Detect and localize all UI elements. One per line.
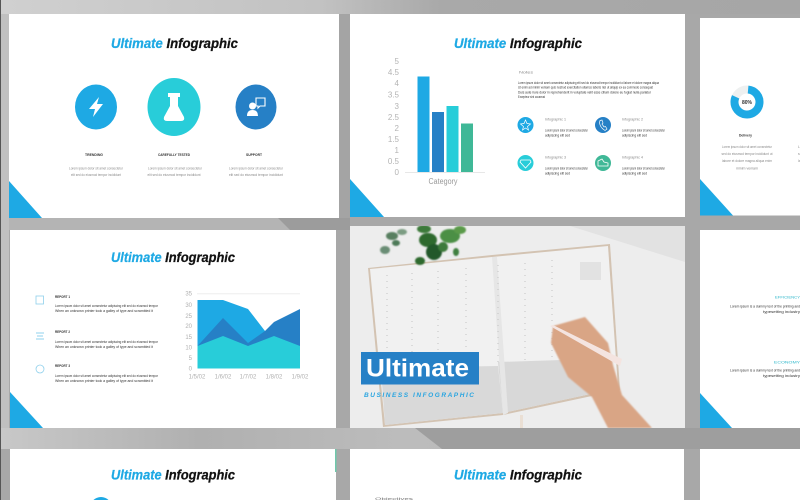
- column: trending: Lorem ipsum dolor sit amet consectetur: [69, 166, 124, 170]
- bar chart: 0: [395, 168, 400, 177]
- hand with pen: [550, 317, 652, 428]
- column: carefully tested: Lorem ipsum dolor sit amet consectetur: [148, 166, 203, 170]
- feature: star: Lorem ipsum dolor sit amet consectetur: [545, 128, 589, 132]
- panel: bar chart slide: [350, 14, 685, 217]
- notes text block: Lorem ipsum dolor sit amet consectetur adipiscing elit sed do eiusmod tempor incididunt ut labore et dolore magna aliqua: [518, 81, 659, 85]
- feature: shoe: adipiscing elit sed: [622, 172, 647, 176]
- area chart: 0: [189, 366, 193, 372]
- notes text block: Duis aute irure dolor in reprehenderit in voluptate velit esse cillum dolore eu fugiat nulla pariatur: [518, 90, 652, 94]
- text block 2: [730, 360, 800, 378]
- cropped next column: [798, 145, 800, 163]
- icon: flask: [148, 78, 200, 136]
- list item 2: Lorem ipsum dolor sit amet consectetur adipiscing elit sed do eiusmod tempor: [55, 340, 159, 344]
- corner triangle: [700, 179, 733, 216]
- list item 3: When an unknown printer took a galley of type and scrambled it: [55, 379, 153, 383]
- donut caption: Delivery: [739, 134, 752, 138]
- corner triangle: [350, 179, 384, 217]
- icon: support person: [236, 84, 276, 130]
- area chart: 1/5/02: [189, 374, 206, 380]
- heading: Ultimate Infographic: [111, 250, 235, 265]
- area chart: 15: [185, 335, 193, 341]
- list item 2: REPORT 2: [55, 330, 70, 334]
- column: carefully tested: elit sed do eiusmod tempor incididunt: [148, 173, 201, 177]
- donut caption: Lorem ipsum dolor sit amet consectetur: [722, 145, 773, 149]
- heading: Ultimate Infographic: [454, 468, 582, 482]
- panel: area chart slide: [10, 230, 336, 428]
- bar chart: 3: [395, 102, 400, 111]
- text block 1: typesetting industry: [763, 310, 800, 314]
- column: support: [229, 153, 284, 177]
- feature: star: [518, 117, 589, 138]
- notes text block: [518, 70, 659, 99]
- panel: bottom left slide (cropped): [10, 449, 336, 500]
- area chart: 30: [185, 303, 193, 309]
- feature: shoe: [595, 155, 666, 176]
- donut caption: sed do eiusmod tempor incididunt ut: [722, 152, 773, 156]
- feature: diamond: adipiscing elit sed: [545, 172, 570, 176]
- notebook photo: [368, 244, 620, 428]
- bar chart: [388, 57, 485, 186]
- feature: phone: adipiscing elit sed: [622, 134, 647, 138]
- area chart: 10: [185, 346, 193, 352]
- area chart: 1/8/02: [266, 374, 283, 380]
- notes text block: Notes: [519, 70, 533, 74]
- title box: Ultimate: [366, 354, 469, 382]
- column: trending: [69, 153, 124, 177]
- bar chart: 4.5: [388, 68, 400, 77]
- panel: bottom right slide (cropped): [700, 449, 800, 500]
- corner triangle: [9, 181, 42, 218]
- donut chart: [733, 88, 761, 116]
- area chart: 35: [185, 292, 193, 298]
- text block 1: [730, 294, 800, 314]
- feature: diamond: [518, 155, 589, 176]
- panel: bottom middle slide (cropped): [350, 449, 684, 500]
- bar chart: 2: [395, 124, 400, 133]
- area chart: 5: [189, 356, 193, 362]
- list item 3: REPORT 3: [55, 364, 70, 368]
- column: support: elit sed do eiusmod tempor incididunt: [229, 173, 283, 177]
- donut caption: labore et dolore magna aliqua enim: [722, 159, 772, 163]
- bar chart: 3.5: [388, 90, 400, 100]
- area chart: 25: [185, 314, 193, 320]
- feature: shoe: Lorem ipsum dolor sit amet consectetur: [622, 166, 666, 170]
- bar chart: 4: [395, 79, 400, 88]
- feature: star: Infographic 1: [545, 118, 566, 122]
- panel: text slide (cropped): [700, 230, 800, 428]
- heading: Ultimate Infographic: [111, 468, 235, 482]
- list item 3: Lorem ipsum dolor sit amet consectetur adipiscing elit sed do eiusmod tempor: [55, 374, 159, 378]
- panel: icon trio slide: [9, 14, 339, 218]
- donut caption: [722, 134, 773, 170]
- donut caption: minim veniam: [736, 166, 758, 170]
- plant: [380, 225, 466, 265]
- corner triangle: [700, 393, 732, 428]
- column: carefully tested: CAREFULLY TESTED: [158, 153, 190, 157]
- feature: phone: Infographic 2: [622, 118, 643, 122]
- bar chart: 5: [395, 57, 400, 66]
- heading: Ultimate Infographic: [454, 36, 582, 51]
- corner triangle: [10, 392, 43, 428]
- donut chart: 80%: [742, 100, 753, 106]
- list item 1: REPORT 1: [55, 295, 70, 299]
- feature: star: adipiscing elit sed: [545, 134, 570, 138]
- list item 1: [36, 295, 159, 313]
- feature: shoe: Infographic 4: [622, 156, 643, 160]
- column: support: SUPPORT: [246, 153, 263, 157]
- feature: diamond: Infographic 3: [545, 156, 566, 160]
- area chart: 1/9/02: [292, 374, 309, 380]
- area chart: [185, 292, 309, 380]
- bar chart: 0.5: [388, 157, 400, 166]
- feature: diamond: Lorem ipsum dolor sit amet consectetur: [545, 166, 589, 170]
- column: support: Lorem ipsum dolor sit amet consectetur: [229, 166, 284, 170]
- area chart: 1/7/02: [240, 374, 257, 380]
- bar chart: Category: [428, 177, 458, 186]
- column: trending: elit sed do eiusmod tempor incididunt: [71, 173, 121, 177]
- list item 1: When an unknown printer took a galley of type and scrambled it: [55, 309, 153, 313]
- icon: lightning: [75, 84, 117, 130]
- bar chart: 1: [395, 146, 400, 155]
- area chart: 1/6/02: [215, 374, 232, 380]
- panel: donut slide (cropped): [700, 18, 800, 216]
- area chart: 20: [185, 324, 193, 330]
- feature: phone: Lorem ipsum dolor sit amet consectetur: [622, 128, 666, 132]
- text block 2: typesetting industry: [763, 374, 800, 378]
- panel: notebook photo cover: [350, 225, 685, 428]
- feature: phone: [595, 117, 666, 138]
- subtitle: BUSINESS INFOGRAPHIC: [364, 392, 474, 399]
- bar chart: 2.5: [388, 113, 400, 122]
- column: trending: TRENDING: [85, 153, 103, 157]
- text block 1: EFFICIENCY: [775, 294, 800, 300]
- bar chart: 1.5: [388, 135, 400, 144]
- list item 2: [36, 330, 159, 349]
- column: carefully tested: [148, 153, 203, 177]
- icon circle cropped: [90, 497, 112, 500]
- list item 1: Lorem ipsum dolor sit amet consectetur adipiscing elit sed do eiusmod tempor: [55, 304, 159, 308]
- list item 2: When an unknown printer took a galley of type and scrambled it: [55, 345, 153, 349]
- notes text block: Excepteur sint occaecat: [518, 95, 545, 99]
- text block 2: ECONOMY: [774, 360, 800, 364]
- list item 3: [36, 364, 159, 383]
- notes text block: Ut enim ad minim veniam quis nostrud exercitation ullamco laboris nisi ut aliquip ex ea commodo consequat: [518, 86, 653, 90]
- heading: Ultimate Infographic: [111, 36, 238, 51]
